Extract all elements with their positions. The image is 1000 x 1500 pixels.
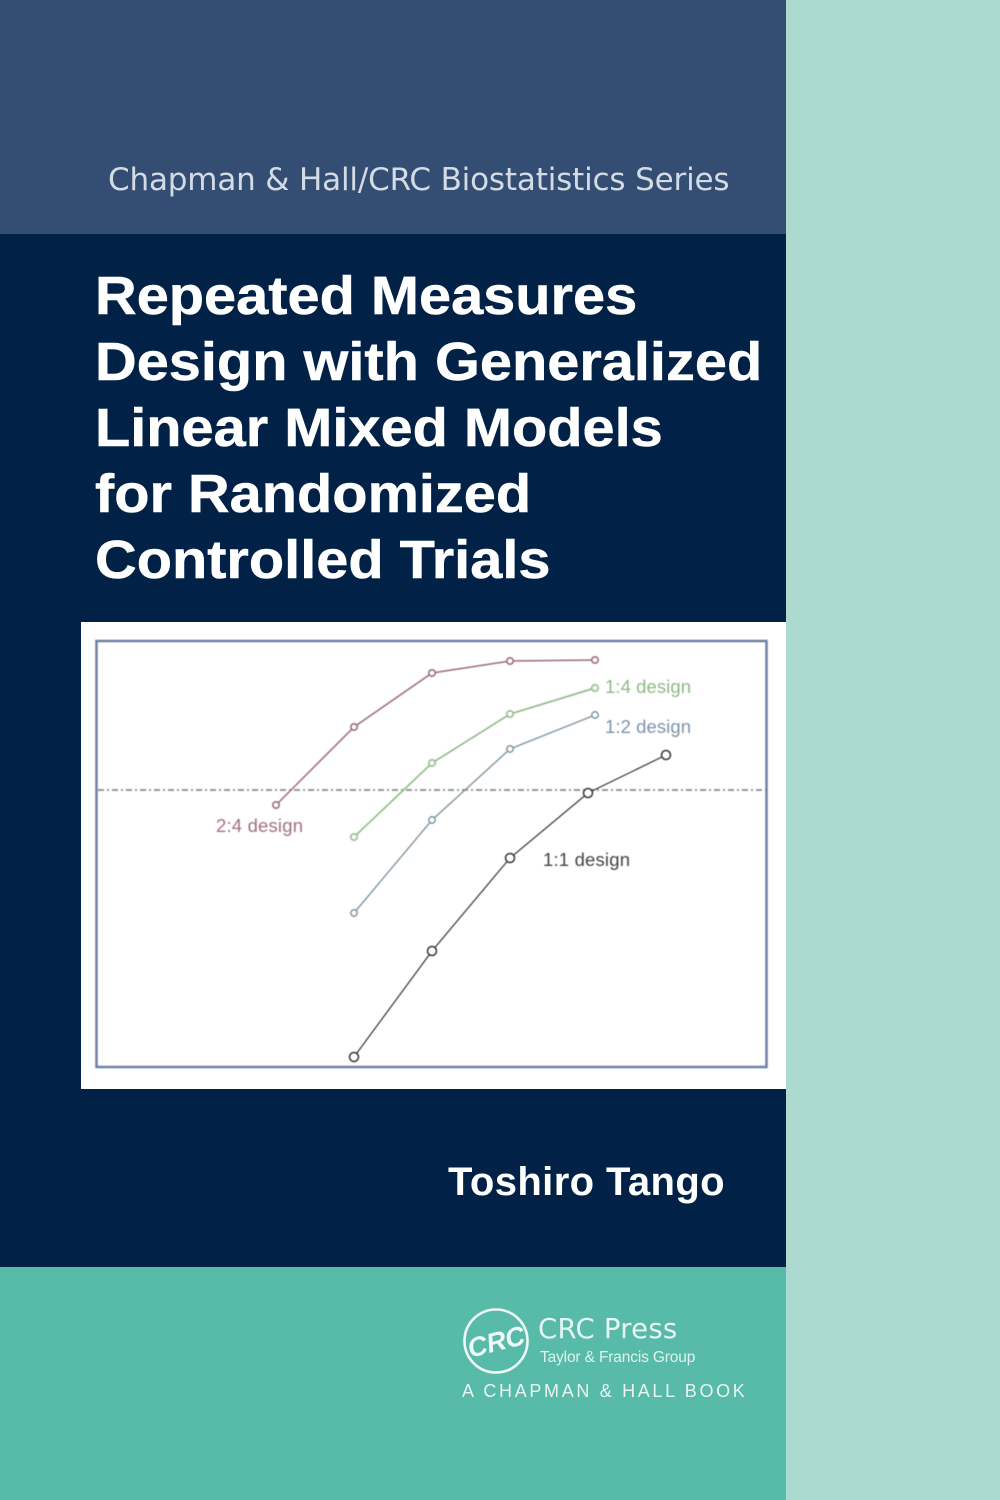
title: Design with Generalized: [95, 332, 762, 392]
panel: pale teal spine strip: [786, 0, 1000, 1500]
panel: teal publisher band: [0, 1267, 786, 1500]
series: 1:2 design: [351, 712, 598, 916]
series: 2:4 design: [273, 657, 598, 808]
chart frame: [96, 641, 766, 1067]
publisher name: CRC Press: [538, 1313, 678, 1345]
series: 1:4 design: [351, 685, 598, 840]
title: Repeated Measures: [95, 266, 637, 326]
series name: Chapman & Hall/CRC Biostatistics Series: [108, 162, 729, 198]
series: 1:1 design: [350, 750, 670, 1062]
title: Linear Mixed Models: [95, 398, 663, 458]
label: 2:4 design: 2:4 design: [216, 815, 303, 836]
panel: top series band: [0, 0, 786, 234]
imprint line: A CHAPMAN & HALL BOOK: [462, 1381, 747, 1401]
label: 1:4 design: 1:4 design: [605, 676, 691, 697]
author: Toshiro Tango: [448, 1160, 725, 1204]
title: [95, 266, 762, 590]
icon: CRC logo: CRC: [464, 1320, 528, 1364]
panel: navy title band: [0, 234, 786, 1267]
dashed reference line: [98, 789, 766, 791]
label: 1:1 design: 1:1 design: [543, 849, 630, 870]
panel: chart image: [81, 622, 786, 1089]
title: Controlled Trials: [95, 530, 550, 590]
title: for Randomized: [95, 464, 531, 524]
label: 1:2 design: 1:2 design: [605, 716, 691, 737]
publisher group: Taylor & Francis Group: [540, 1349, 695, 1366]
